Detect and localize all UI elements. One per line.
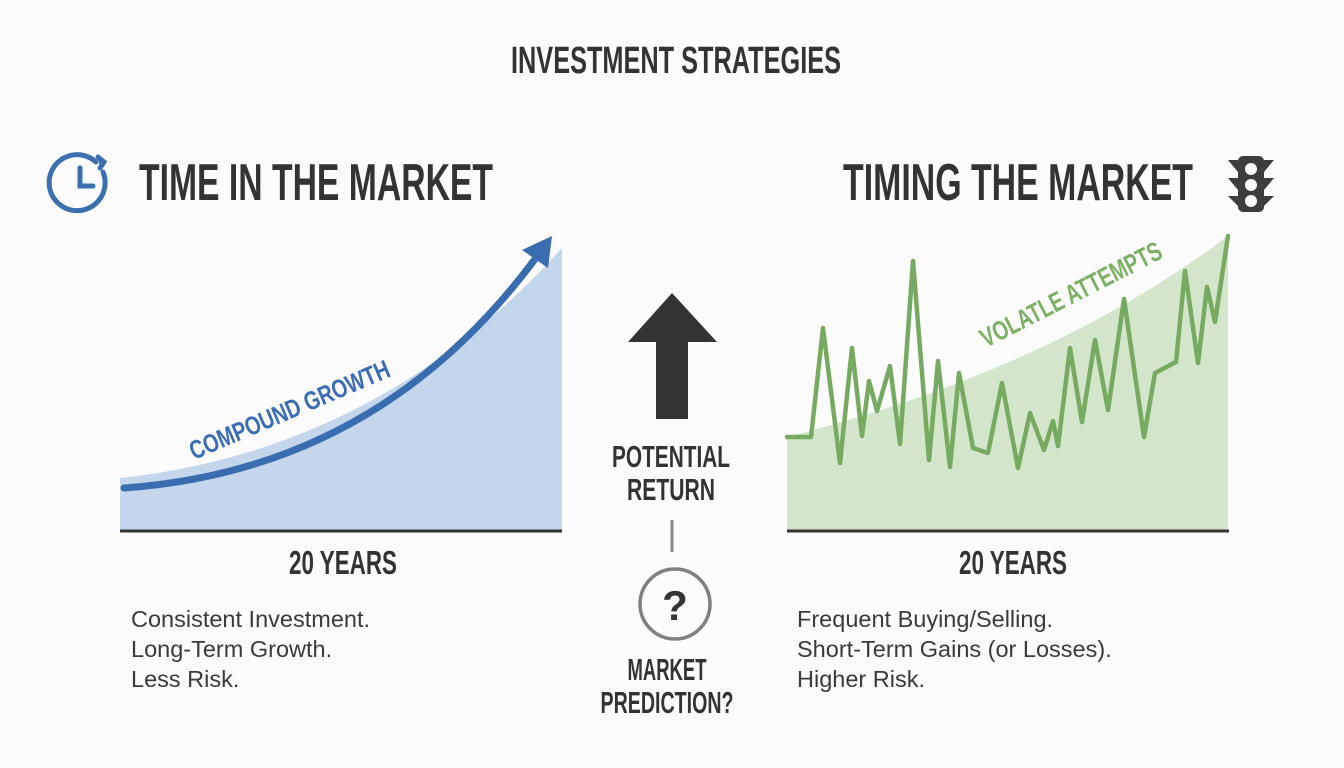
icon: traffic light	[1228, 156, 1274, 212]
icon: question: ?	[662, 582, 688, 629]
text: right description: Short-Term Gains (or Losses).	[797, 636, 1112, 662]
connector line	[670, 520, 674, 552]
chart: compound growth: COMPOUND GROWTH	[185, 354, 394, 466]
chart: volatile attempts: VOLATLE ATTEMPTS	[975, 236, 1167, 353]
label: market prediction: MARKET	[628, 652, 707, 687]
label: market prediction	[600, 652, 734, 720]
icon: clock	[49, 155, 105, 211]
label: 20 years right: 20 YEARS	[959, 544, 1067, 581]
chart: volatile attempts	[787, 236, 1229, 531]
icon: question	[640, 569, 710, 639]
label: potential return: POTENTIAL	[612, 439, 730, 474]
label: market prediction: PREDICTION?	[600, 685, 734, 720]
arrow: potential return	[628, 293, 717, 419]
label: 20 years left: 20 YEARS	[289, 544, 397, 581]
text: left description: Long-Term Growth.	[131, 636, 332, 662]
text: left description	[131, 606, 370, 692]
label: potential return	[612, 439, 730, 507]
chart: compound growth	[120, 236, 562, 531]
text: right description: Frequent Buying/Selling.	[797, 606, 1053, 632]
heading: time in the market: TIME IN THE MARKET	[139, 154, 493, 212]
text: right description: Higher Risk.	[797, 666, 925, 692]
title: INVESTMENT STRATEGIES	[511, 40, 841, 82]
text: left description: Less Risk.	[131, 666, 239, 692]
text: left description: Consistent Investment.	[131, 606, 370, 632]
text: right description	[797, 606, 1112, 692]
label: potential return: RETURN	[627, 472, 715, 507]
